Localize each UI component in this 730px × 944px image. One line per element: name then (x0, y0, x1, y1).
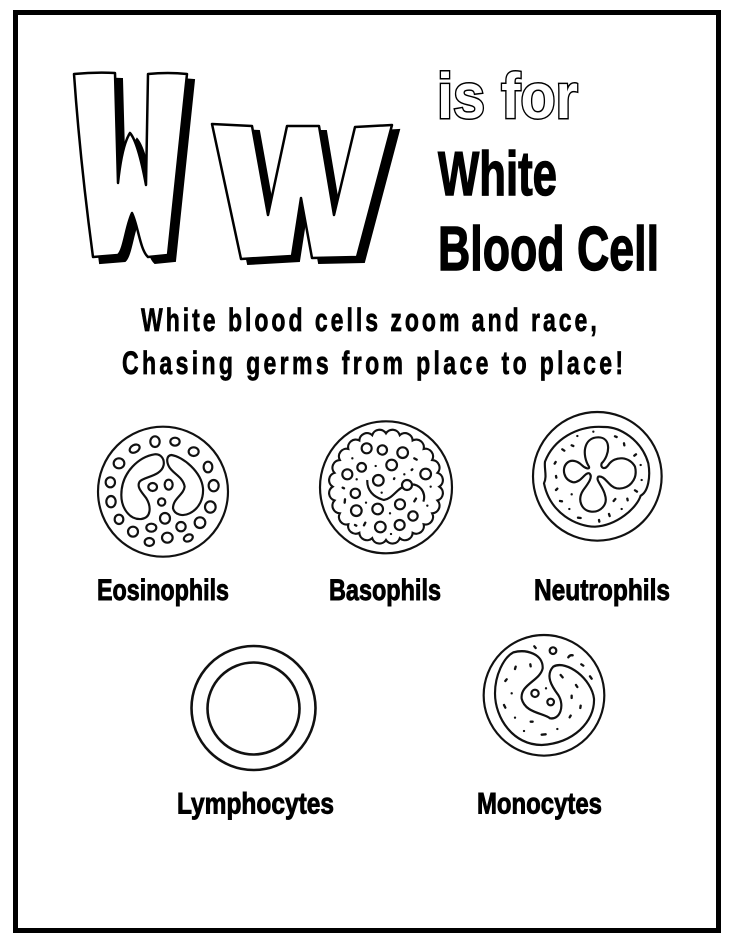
rhyme line 1: White blood cells zoom and race, (141, 302, 597, 338)
label: Neutrophils: Neutrophils (534, 574, 670, 607)
letter: capital W (74, 73, 194, 263)
letter: lowercase w (212, 124, 399, 264)
rhyme line 2: Chasing germs from place to place! (122, 345, 623, 381)
cell: monocyte (484, 635, 604, 756)
cell: basophil (320, 421, 452, 553)
heading: is for: is for (437, 60, 578, 132)
rhyme text (122, 302, 623, 381)
cell: eosinophil (98, 427, 228, 557)
cell: lymphocyte (192, 646, 316, 770)
heading: White: White (438, 140, 557, 209)
label: Eosinophils: Eosinophils (97, 574, 229, 607)
cell: neutrophil (533, 412, 662, 541)
label: Basophils: Basophils (329, 574, 441, 607)
label: Lymphocytes: Lymphocytes (177, 788, 334, 820)
heading letters: W w (74, 73, 399, 264)
label: Monocytes: Monocytes (477, 788, 602, 820)
